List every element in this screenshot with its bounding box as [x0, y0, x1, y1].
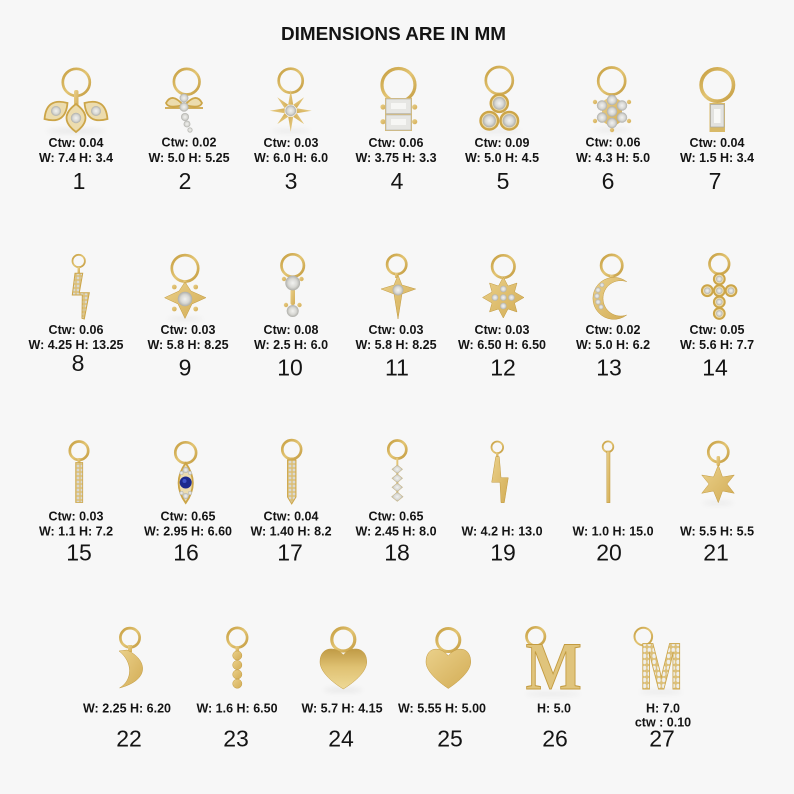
number: 11 [385, 355, 409, 381]
charm 15 [39, 442, 113, 566]
icon: tapered pave bar [282, 440, 301, 504]
caption: Ctw: 0.04 [49, 136, 103, 150]
number: 26 [542, 726, 568, 752]
icon: three bezel stones [478, 67, 522, 132]
caption: ctw : 0.10 [635, 716, 691, 730]
caption: W: 5.7 H: 4.15 [301, 702, 383, 716]
caption: Ctw: 0.03 [369, 323, 423, 337]
caption: W: 5.0 H: 6.2 [576, 338, 650, 352]
charm 6 [576, 68, 650, 194]
charm 4 [355, 68, 437, 194]
charm 12 [458, 255, 546, 381]
caption [576, 323, 650, 352]
charm 2 [148, 69, 230, 194]
icon: sapphire evil eye [175, 442, 196, 503]
caption [680, 136, 754, 165]
icon: four diamond drop [388, 440, 406, 501]
charm 1 [39, 69, 113, 194]
icon: baguette pair [380, 68, 417, 131]
caption: W: 5.0 H: 5.25 [148, 151, 230, 165]
caption [254, 136, 328, 165]
caption [635, 702, 691, 730]
caption: Ctw: 0.65 [161, 510, 215, 524]
caption: W: 1.6 H: 6.50 [196, 702, 278, 716]
icon: bezel cross [702, 254, 736, 319]
charm 21 [680, 442, 754, 566]
caption: W: 5.0 H: 4.5 [465, 151, 539, 165]
icon: gold crescent moon [119, 628, 143, 688]
caption: W: 4.2 H: 13.0 [461, 525, 543, 539]
caption: W: 1.5 H: 3.4 [680, 151, 754, 165]
icon: single baguette [701, 69, 734, 132]
icon: four-point star [381, 255, 416, 319]
caption: W: 6.50 H: 6.50 [458, 338, 546, 352]
icon: gold thin bar [603, 441, 613, 503]
charm 16 [144, 442, 232, 566]
number: 18 [384, 540, 410, 566]
title: DIMENSIONS ARE IN MM [281, 24, 506, 45]
caption: Ctw: 0.03 [264, 136, 318, 150]
caption: Ctw: 0.09 [475, 136, 529, 150]
charm 9 [147, 255, 229, 381]
caption: W: 3.75 H: 3.3 [355, 151, 437, 165]
caption: W: 5.8 H: 8.25 [355, 338, 437, 352]
caption: Ctw: 0.06 [369, 136, 423, 150]
caption: W: 7.4 H: 3.4 [39, 151, 113, 165]
charm 17 [250, 440, 332, 566]
caption: W: 5.5 H: 5.5 [680, 525, 754, 539]
icon: gold serif letter M: M [526, 628, 582, 704]
caption: W: 2.25 H: 6.20 [83, 702, 171, 716]
icon: pave bar [70, 442, 88, 502]
charm 14 [680, 254, 754, 381]
caption [458, 323, 546, 352]
charm 5 [465, 67, 539, 194]
number: 22 [116, 726, 142, 752]
caption: W: 5.8 H: 8.25 [147, 338, 229, 352]
icon: diamond flower [592, 68, 632, 132]
charm 26 [525, 627, 582, 752]
charm 19 [461, 442, 543, 566]
charm 22 [83, 628, 171, 752]
number: 12 [490, 355, 516, 381]
caption: Ctw: 0.04 [264, 510, 318, 524]
charm 23 [196, 628, 278, 752]
caption [355, 136, 437, 165]
number: 20 [596, 540, 622, 566]
caption: Ctw: 0.03 [49, 510, 103, 524]
caption: W: 2.5 H: 6.0 [254, 338, 328, 352]
caption: Ctw: 0.03 [475, 323, 529, 337]
icon: pave lightning bolt [72, 255, 89, 319]
icon: flat gold heart [426, 628, 471, 688]
caption [355, 510, 437, 539]
icon: dragonfly [165, 69, 203, 133]
icon: puffed gold heart [320, 628, 367, 692]
icon: gold lightning bolt [492, 442, 508, 503]
number: 25 [437, 726, 463, 752]
number: 19 [490, 540, 516, 566]
icon: double diamond drop [282, 254, 304, 317]
icon: eight-point star with diamonds [482, 255, 524, 318]
number: 14 [702, 355, 728, 381]
caption: W: 1.1 H: 7.2 [39, 525, 113, 539]
number: 27 [649, 726, 675, 752]
charm 10 [254, 254, 328, 381]
number: 23 [223, 726, 249, 752]
number: 24 [328, 726, 354, 752]
caption [250, 510, 332, 539]
charm 20 [572, 441, 654, 566]
number: 17 [277, 540, 303, 566]
caption: W: 2.45 H: 8.0 [355, 525, 437, 539]
caption: Ctw: 0.06 [49, 323, 103, 337]
icon: three marquise petals [40, 69, 112, 133]
caption [254, 323, 328, 352]
caption: Ctw: 0.08 [264, 323, 318, 337]
number: 13 [596, 355, 622, 381]
number: 1 [73, 168, 85, 194]
icon: gold six-point star [702, 442, 734, 504]
caption: W: 4.25 H: 13.25 [29, 338, 124, 352]
number: 15 [66, 540, 92, 566]
number: 2 [179, 168, 191, 194]
caption [29, 323, 124, 352]
charm 3 [254, 69, 328, 194]
charm 24 [301, 628, 383, 752]
charm 27 [634, 628, 691, 752]
number: 7 [709, 168, 721, 194]
charm 18 [355, 440, 437, 566]
caption: Ctw: 0.04 [690, 136, 744, 150]
caption: Ctw: 0.02 [162, 136, 216, 150]
number: 16 [173, 540, 199, 566]
number: 21 [703, 540, 729, 566]
caption [355, 323, 437, 352]
number: 9 [179, 355, 191, 381]
caption [465, 136, 539, 165]
charm 11 [355, 255, 437, 381]
caption [39, 510, 113, 539]
caption [680, 323, 754, 352]
caption: H: 5.0 [537, 702, 571, 716]
caption: H: 7.0 [646, 702, 680, 716]
caption [39, 136, 113, 165]
charm 8 [29, 255, 124, 376]
caption [576, 136, 650, 165]
caption [148, 136, 230, 165]
icon: pave letter M: M [639, 629, 683, 703]
caption: Ctw: 0.02 [586, 323, 640, 337]
caption: W: 5.55 H: 5.00 [398, 702, 486, 716]
caption: W: 5.6 H: 7.7 [680, 338, 754, 352]
caption: Ctw: 0.05 [690, 323, 744, 337]
caption [147, 323, 229, 352]
number: 10 [277, 355, 303, 381]
caption: W: 1.0 H: 15.0 [572, 525, 654, 539]
number: 6 [602, 168, 614, 194]
charm 7 [680, 69, 754, 194]
caption: W: 6.0 H: 6.0 [254, 151, 328, 165]
caption: Ctw: 0.65 [369, 510, 423, 524]
caption: W: 4.3 H: 5.0 [576, 151, 650, 165]
caption: Ctw: 0.06 [586, 136, 640, 150]
icon: beaded bar [228, 628, 247, 688]
number: 8 [72, 350, 84, 376]
caption [144, 510, 232, 539]
number: 3 [285, 168, 297, 194]
caption: Ctw: 0.03 [161, 323, 215, 337]
caption: W: 1.40 H: 8.2 [250, 525, 332, 539]
icon: eight-point starburst [270, 69, 312, 132]
charm 13 [576, 255, 650, 381]
number: 4 [391, 168, 404, 194]
caption: W: 2.95 H: 6.60 [144, 525, 232, 539]
icon: north star with diamond [164, 255, 206, 320]
icon: pave crescent moon [593, 255, 627, 319]
charm 25 [398, 628, 486, 752]
number: 5 [497, 168, 509, 194]
